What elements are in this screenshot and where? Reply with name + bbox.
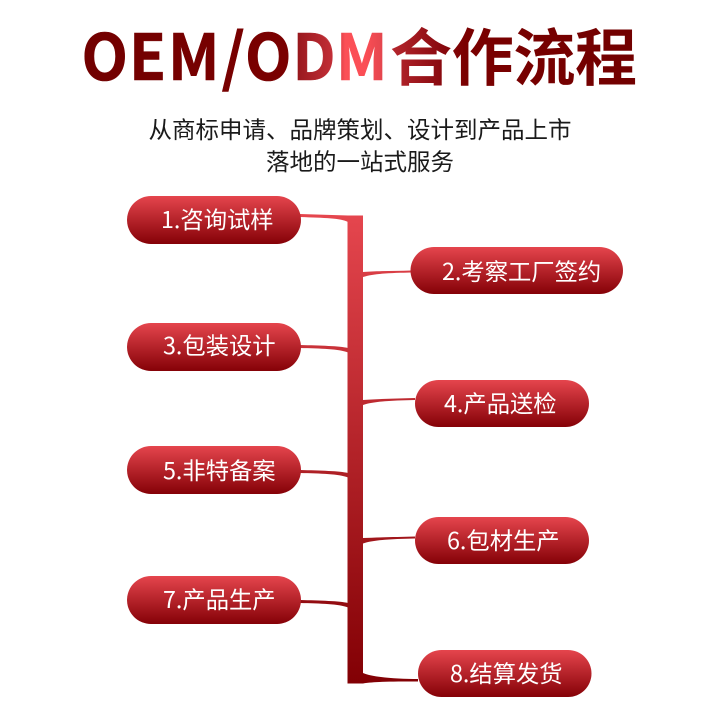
title: OEM/ODM xyxy=(82,6,387,98)
step 6 pill: 6.包材生产 xyxy=(447,522,560,556)
step 3 pill xyxy=(127,323,301,371)
step 4 pill: 4.产品送检 xyxy=(444,385,557,419)
step 7 pill xyxy=(127,576,301,624)
title: 合作流程 xyxy=(390,8,637,98)
step 3 pill: 3.包装设计 xyxy=(163,327,276,361)
timeline trunk and connectors xyxy=(300,214,418,684)
step 7 pill: 7.产品生产 xyxy=(163,581,276,615)
step 5 pill xyxy=(127,446,301,494)
step 8 pill: 8.结算发货 xyxy=(450,655,563,689)
step 5 pill: 5.非特备案 xyxy=(163,452,276,486)
subtitle text: 从商标申请、品牌策划、设计到产品上市 xyxy=(148,111,572,145)
step 1 pill xyxy=(127,196,301,244)
step 8 pill xyxy=(418,650,592,697)
subtitle text xyxy=(148,111,572,177)
step 6 pill xyxy=(415,517,589,564)
step 1 pill: 1.咨询试样 xyxy=(161,201,274,235)
subtitle text: 落地的一站式服务 xyxy=(266,143,454,177)
step 2 pill: 2.考察工厂签约 xyxy=(442,253,601,287)
step 4 pill xyxy=(415,380,589,427)
title xyxy=(82,6,637,98)
step 2 pill xyxy=(410,247,623,294)
